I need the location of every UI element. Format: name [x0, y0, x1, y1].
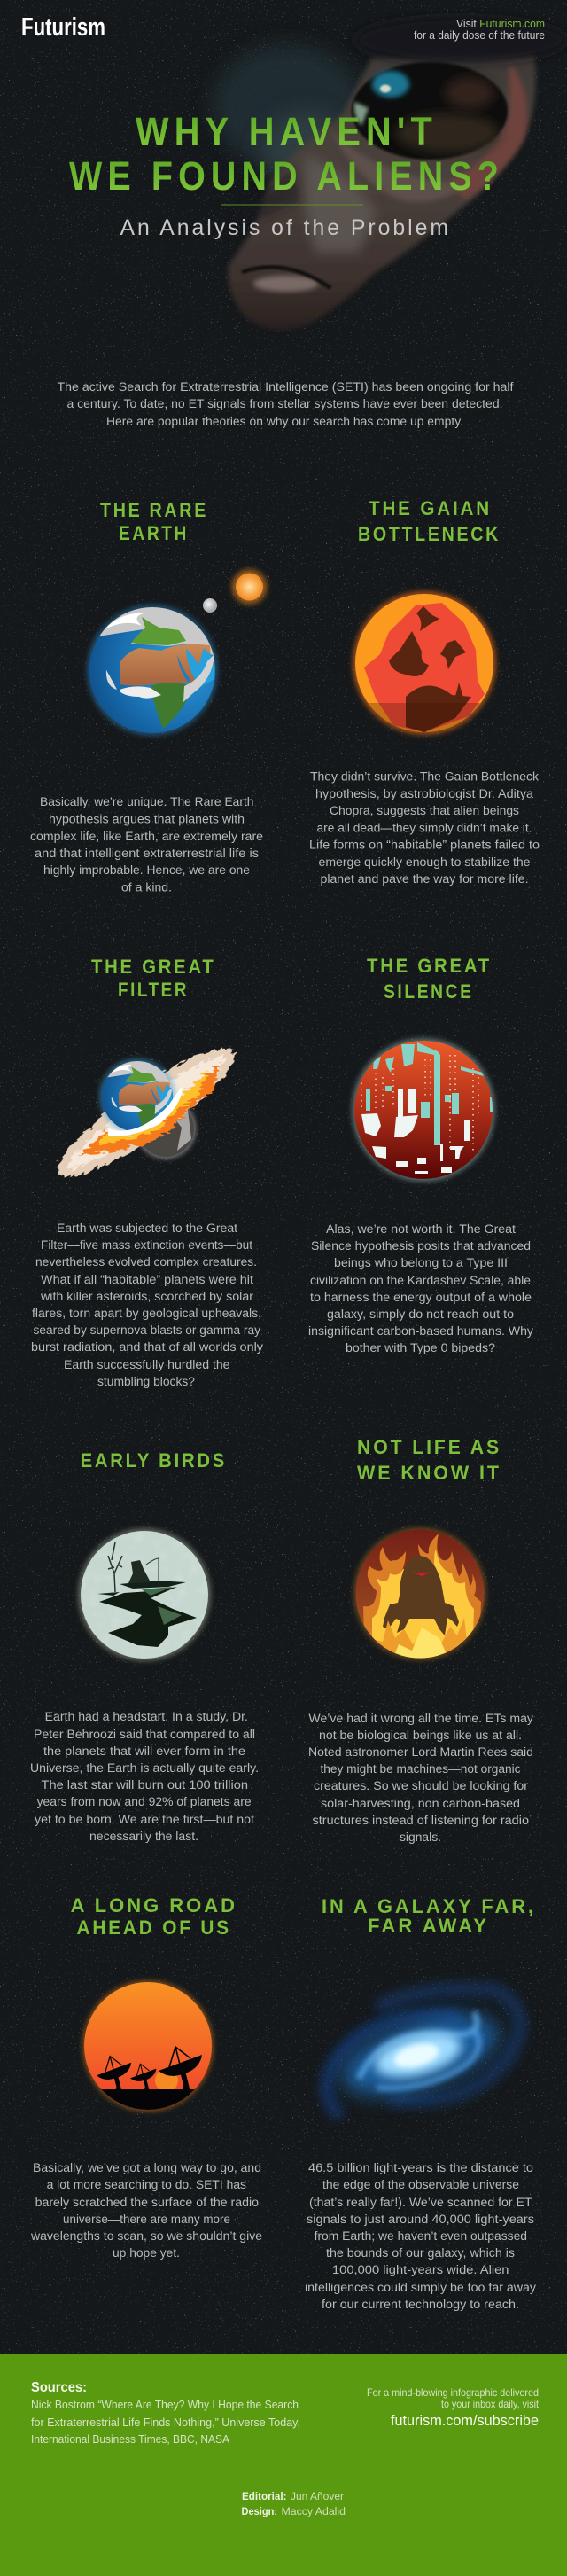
sources heading: Sources: [31, 2380, 87, 2395]
intro text: The active Search for Extraterrestrial Intelligence (SETI) has been ongoing for half [57, 380, 514, 394]
body text: great filter: nevertheless evolved complex creatures. [35, 1255, 257, 1268]
body text: not life: they might be machines—not organic [321, 1762, 521, 1776]
body text: long road: wavelengths to scan, so we shouldn’t give [30, 2229, 262, 2243]
body text: gaian: hypothesis, by astrobiologist Dr. Aditya [315, 787, 534, 800]
body text: galaxy: from Earth; we haven’t even outpassed [315, 2229, 527, 2243]
heading: great filter: THE GREAT [91, 956, 216, 978]
body text: great filter: Earth was subjected to the Great [57, 1222, 237, 1235]
body text: great silence: to harness the energy output of a whole [310, 1291, 532, 1304]
body text: gaian: emerge quickly enough to stabilize the [319, 855, 530, 869]
heading: galaxy [322, 1895, 536, 1937]
body text: great filter: seared by supernova blasts or gamma ray [34, 1323, 260, 1337]
logo: Futurism: Futurism [21, 13, 105, 42]
body text: great silence: bother with Type 0 bipeds? [346, 1341, 495, 1354]
subscribe callout [367, 2386, 540, 2429]
body text: not life: creatures. So we should be looking for [314, 1779, 529, 1792]
heading: great silence [367, 955, 492, 1003]
body text: great silence: insignificant carbon-based humans. Why [308, 1324, 533, 1338]
credits: Jun Añover [291, 2492, 344, 2502]
body text: great filter: Filter—five mass extinction events—but [41, 1238, 252, 1252]
body text: long road: barely scratched the surface of the radio [35, 2196, 259, 2209]
intro text: a century. To date, no ET signals from stellar systems have ever been detected. [67, 397, 503, 410]
icon: city planet [352, 1038, 495, 1182]
body text: early birds: Earth had a headstart. In a study, Dr. [45, 1710, 248, 1723]
panel: the rare earth [30, 499, 268, 894]
body text: great silence: Silence hypothesis posits that advanced [311, 1239, 531, 1253]
sources text: Nick Bostrom “Where Are They? Why I Hope the Search [31, 2398, 299, 2411]
body text: early birds [30, 1710, 259, 1843]
body text: not life: not be biological beings like us at all. [319, 1729, 522, 1742]
body text: galaxy: (that’s really far!). We’ve scanned for ET [309, 2196, 532, 2209]
body text: gaian: They didn’t survive. The Gaian Bottleneck [310, 770, 539, 784]
body text: rare earth: complex life, like Earth, are extremely rare [30, 830, 263, 843]
icon: astronaut fishing on a pale planet [78, 1528, 211, 1661]
body text: great silence: galaxy, simply do not reach out to [327, 1308, 514, 1321]
body text: early birds: The last star will burn out 100 trillion [41, 1778, 248, 1791]
header link: Visit Futurism.com [456, 17, 545, 30]
body text: great filter: What if all “habitable” planets were hit [41, 1273, 253, 1286]
heading: gaian bottleneck: THE GAIAN [369, 497, 492, 519]
body text: great silence: civilization on the Kardashev Scale, able [310, 1274, 531, 1287]
heading: early birds: EARLY BIRDS [81, 1449, 227, 1471]
heading: not life as we know it: NOT LIFE AS [357, 1436, 501, 1458]
panel: the gaian bottleneck [309, 497, 540, 886]
body text: early birds: yet to be born. We are the first—but not [35, 1813, 254, 1826]
heading: gaian bottleneck [358, 497, 501, 545]
title: WHY HAVEN'T [136, 109, 438, 154]
credits [241, 2492, 346, 2517]
body text: great filter: Earth successfully hurdled the [64, 1358, 230, 1371]
heading: the rare earth: EARTH [119, 522, 189, 544]
body text: long road [30, 2161, 262, 2260]
body text: great silence: beings who belong to a Type III [334, 1256, 508, 1269]
body text: not life: solar-harvesting, non carbon-based [321, 1797, 520, 1810]
heading: not life as we know it: WE KNOW IT [357, 1462, 501, 1484]
subtitle: An Analysis of the Problem [120, 215, 451, 240]
body text: great silence [308, 1222, 533, 1354]
body text: great filter: stumbling blocks? [97, 1375, 195, 1388]
header link [414, 17, 545, 42]
heading: the rare earth: THE RARE [100, 499, 208, 521]
heading: long road: A LONG ROAD [71, 1894, 237, 1916]
body text: galaxy: 46.5 billion light-years is the distance to [308, 2161, 533, 2174]
icon: radio dishes at sunset [80, 1980, 221, 2116]
body text: rare earth: of a kind. [121, 881, 172, 894]
body text: rare earth: hypothesis argues that planets with [49, 812, 245, 826]
body text: early birds: Universe, the Earth is actually quite early. [30, 1761, 259, 1775]
sources text: International Business Times, BBC, NASA [31, 2432, 229, 2446]
body text: long road: up hope yet. [113, 2246, 180, 2260]
panel: a long road ahead of us [30, 1894, 262, 2260]
icon: earth with asteroid debris ring [45, 1032, 247, 1193]
heading: long road: AHEAD OF US [76, 1916, 231, 1939]
body text: not life: We’ve had it wrong all the time. ETs may [308, 1712, 533, 1725]
subscribe callout: to your inbox daily, visit [441, 2398, 540, 2410]
icon: earth with moon and sun [87, 569, 268, 736]
sources text: for Extraterrestrial Life Finds Nothing,” Universe Today, [31, 2416, 300, 2429]
body text: not life: Noted astronomer Lord Martin Rees said [308, 1745, 533, 1759]
panel: in a galaxy far far away [305, 1895, 536, 2311]
body text: rare earth: and that intelligent extraterrestrial life is [35, 847, 259, 860]
body text: rare earth: Basically, we’re unique. The Rare Earth [40, 795, 253, 808]
body text: not life: structures instead of listening for radio [312, 1814, 529, 1827]
credits: Design: [241, 2507, 277, 2517]
intro text: Here are popular theories on why our search has come up empty. [106, 415, 463, 428]
heading: great silence: SILENCE [384, 980, 473, 1003]
body text: early birds: the planets that will ever form in the [43, 1745, 245, 1758]
body text: early birds: Peter Behroozi said that compared to all [34, 1728, 255, 1741]
body text: galaxy: the bounds of our galaxy, which is [326, 2246, 515, 2260]
body text: galaxy: the edge of the observable universe [322, 2178, 519, 2191]
body text: early birds: necessarily the last. [89, 1830, 198, 1843]
body text: early birds: years from now and 92% of planets are [37, 1795, 252, 1808]
body text: galaxy [305, 2161, 536, 2311]
body text: great filter: with killer asteroids, scorched by solar [40, 1290, 254, 1303]
body text: galaxy: intelligences could simply be too far away [305, 2281, 536, 2294]
panel: early birds [30, 1449, 259, 1843]
body text: great filter: burst radiation, and that of all worlds only [31, 1340, 263, 1354]
body text: galaxy: 100,000 light-years wide. Alien [332, 2263, 509, 2276]
panel: the great filter [31, 956, 263, 1388]
panel: footer [0, 2354, 567, 2576]
icon: burning planet [353, 591, 496, 738]
subscribe callout: For a mind-blowing infographic delivered [367, 2386, 539, 2399]
illustration: alien face [213, 17, 567, 329]
credits: Maccy Adalid [282, 2507, 346, 2517]
icon: machine silhouette in flames [353, 1527, 486, 1667]
body text: rare earth: highly improbable. Hence, we are one [43, 863, 250, 877]
heading: galaxy: IN A GALAXY FAR, [322, 1895, 536, 1917]
credits: Editorial: [242, 2492, 287, 2502]
body text: galaxy: signals to just around 40,000 light-years [307, 2213, 534, 2226]
panel: not life as we know it [308, 1436, 533, 1844]
body text: gaian: are all dead—they simply didn’t make it. [317, 821, 532, 834]
heading: gaian bottleneck: BOTTLENECK [358, 523, 501, 545]
body text: great filter: flares, torn apart by geological upheavals, [32, 1307, 261, 1320]
body text: rare earth [30, 795, 263, 894]
body text: gaian [309, 770, 540, 886]
heading: the rare earth [100, 499, 208, 544]
intro text [57, 380, 514, 428]
body text: long road: universe—there are many more [63, 2213, 230, 2226]
heading: long road [71, 1894, 237, 1939]
panel: the great silence [308, 955, 533, 1354]
sources text [31, 2398, 300, 2446]
body text: gaian: planet and pave the way for more life. [321, 872, 528, 886]
heading: great filter [91, 956, 216, 1001]
body text: gaian: Chopra, suggests that alien beings [330, 804, 519, 817]
body text: gaian: Life forms on “habitable” planets failed to [309, 839, 540, 852]
icon: spiral galaxy [326, 1989, 520, 2117]
heading: great filter: FILTER [118, 979, 189, 1001]
body text: not life [308, 1712, 533, 1844]
body text: long road: Basically, we’ve got a long way to go, and [33, 2161, 261, 2174]
heading: not life as we know it [357, 1436, 501, 1484]
body text: great filter [31, 1222, 263, 1388]
subscribe callout: futurism.com/subscribe [391, 2412, 539, 2429]
heading: galaxy: FAR AWAY [368, 1915, 489, 1937]
title: WE FOUND ALIENS? [69, 153, 504, 199]
body text: long road: a lot more searching to do. SETI has [47, 2178, 246, 2191]
title [69, 109, 504, 199]
heading: great silence: THE GREAT [367, 955, 492, 977]
header link: for a daily dose of the future [414, 28, 545, 42]
body text: galaxy: for our current technology to reach. [322, 2298, 519, 2311]
body text: great silence: Alas, we’re not worth it. The Great [326, 1222, 516, 1236]
body text: not life: signals. [400, 1831, 441, 1844]
